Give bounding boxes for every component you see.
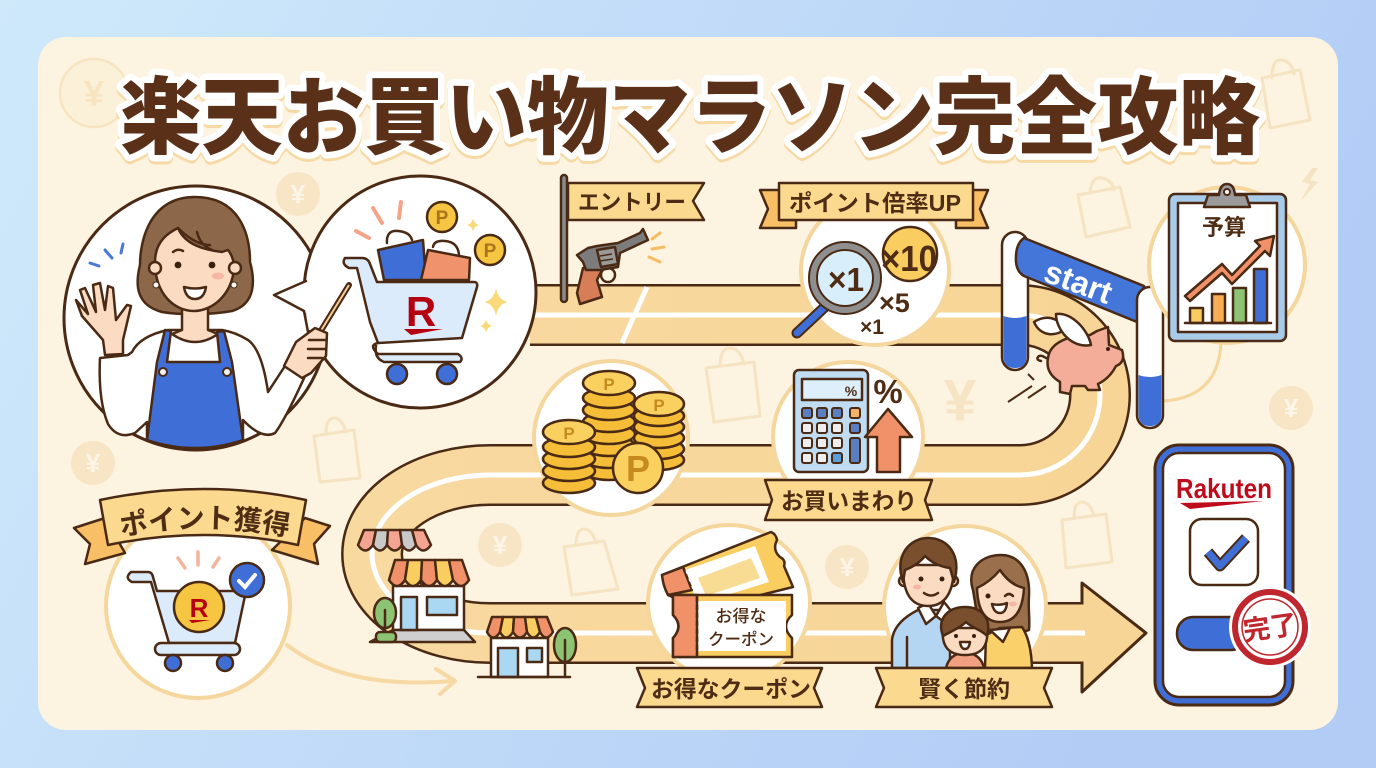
banner: point multiplier up: ポイント倍率UP — [789, 190, 961, 216]
panel: family — [884, 526, 1046, 688]
keypad — [802, 408, 860, 463]
panel: calculator: % — [845, 383, 858, 399]
connector line behind clipboard — [1163, 343, 1221, 401]
magnifier — [797, 304, 828, 333]
percent sign: % — [873, 373, 903, 410]
panel: calculator — [773, 362, 923, 512]
background decoration: yen coins and bags: ¥ — [944, 368, 976, 433]
panel: gold point coins: P — [563, 424, 575, 443]
bar chart — [1185, 269, 1271, 323]
arch banner: start — [1040, 253, 1117, 311]
panel: point cart — [106, 514, 290, 698]
background decoration: yen coins and bags: ¥ — [84, 73, 104, 114]
banner: coupon: お得なクーポン — [651, 676, 811, 702]
budget label: 予算 — [1202, 215, 1246, 240]
panel: gold point coins: P — [653, 396, 665, 415]
panel: cart speech bubble — [274, 176, 536, 408]
icon: entry flag with banner: エントリー — [578, 190, 686, 215]
woman body — [985, 627, 1032, 668]
coin stacks — [543, 371, 684, 493]
child — [946, 652, 984, 668]
woman hair — [971, 555, 1029, 640]
up arrow — [865, 409, 912, 472]
sparkle marks — [90, 244, 123, 266]
R coin — [174, 582, 224, 632]
banner: shopping around — [765, 480, 932, 520]
man head — [899, 576, 909, 586]
background decoration: yen coins and bags: ¥ — [1284, 393, 1299, 423]
background decoration: yen coins and bags: ¥ — [291, 179, 306, 209]
x5 and x1: ×5 — [879, 288, 910, 318]
panel: start arch — [1002, 232, 1163, 428]
banner: point multiplier up — [760, 183, 988, 228]
panel: presenter woman — [64, 186, 328, 450]
small shop — [491, 638, 548, 677]
Rakuten logo: Rakuten — [1176, 473, 1272, 504]
rising arrow — [1185, 236, 1274, 301]
panel: point multiplier: ×1 — [828, 261, 864, 298]
calculator body — [794, 370, 868, 472]
left pillar — [1002, 232, 1028, 370]
neck — [172, 305, 218, 342]
race track road with arrow — [372, 287, 1146, 692]
panel: budget clipboard — [1149, 184, 1305, 343]
banner: coupon — [637, 668, 822, 707]
check box — [1190, 519, 1258, 585]
woman face — [977, 570, 1024, 622]
progress pill — [1177, 617, 1247, 650]
title: 楽天お買い物マラソン完全攻略 — [120, 71, 1260, 165]
back shop awning — [358, 530, 431, 550]
x10 coin — [883, 227, 937, 281]
check badge — [230, 563, 264, 597]
background decoration: yen coins and bags — [60, 59, 1318, 595]
panel: point cart: R — [190, 593, 209, 623]
arch banner — [1016, 238, 1144, 322]
hair — [138, 197, 253, 314]
completion stamp: 完了 — [1241, 609, 1299, 647]
background decoration: yen coins and bags: ¥ — [840, 552, 855, 582]
icon: flying piggy bank — [1008, 314, 1123, 402]
background decoration: yen coins and bags: ¥ — [493, 530, 508, 560]
panel: point multiplier — [797, 197, 949, 345]
Rakuten R logo: R — [406, 288, 436, 335]
apron — [147, 330, 243, 448]
panel: coupons — [648, 525, 810, 681]
trees — [374, 598, 396, 628]
background decoration: yen coins and bags: ¥ — [86, 448, 101, 478]
man body — [892, 610, 950, 668]
shopping bags — [387, 231, 459, 255]
hair fringe and ears — [178, 228, 212, 250]
curved connector arrow — [287, 645, 455, 694]
panel: point multiplier: ×1 — [860, 316, 884, 339]
body and sleeves — [100, 330, 305, 448]
completion stamp — [1229, 586, 1311, 668]
coins — [427, 202, 457, 232]
panel: stores — [358, 530, 576, 677]
panel: gold point coins: P — [626, 448, 650, 489]
panel: cart speech bubble: P — [484, 241, 497, 262]
face — [155, 228, 234, 311]
panel: gold point coins: P — [603, 375, 615, 394]
large P coin — [613, 443, 663, 493]
panel: gold point coins — [534, 361, 688, 515]
banner: point acquisition — [72, 488, 332, 566]
icon: entry flag with banner — [561, 175, 704, 302]
waving left hand — [76, 283, 131, 355]
cart — [344, 258, 477, 343]
banner: point acquisition: ポイント獲得 — [121, 505, 290, 537]
icon: starter pistol — [577, 229, 664, 304]
banner: shopping around: お買いまわり — [781, 488, 917, 514]
panel: cart speech bubble: P — [436, 208, 449, 229]
main shop — [393, 586, 464, 630]
eyes, brow, mouth, cheek — [175, 262, 181, 268]
panel: coupons: お得な — [716, 607, 766, 626]
banner: smart saving — [876, 668, 1052, 707]
banner: smart saving: 賢く節約 — [918, 676, 1010, 702]
clip — [1204, 184, 1250, 207]
panel: smartphone completion — [1155, 445, 1311, 705]
panel: point multiplier: ×10 — [881, 238, 937, 279]
cart — [128, 572, 246, 643]
sparkles and rays — [467, 218, 508, 333]
panel: coupons: クーポン — [708, 630, 774, 649]
pointer hand and stick — [284, 285, 349, 378]
tilted ticket — [662, 532, 793, 610]
right pillar — [1137, 287, 1163, 428]
front ticket — [673, 595, 792, 657]
rays — [178, 552, 219, 568]
